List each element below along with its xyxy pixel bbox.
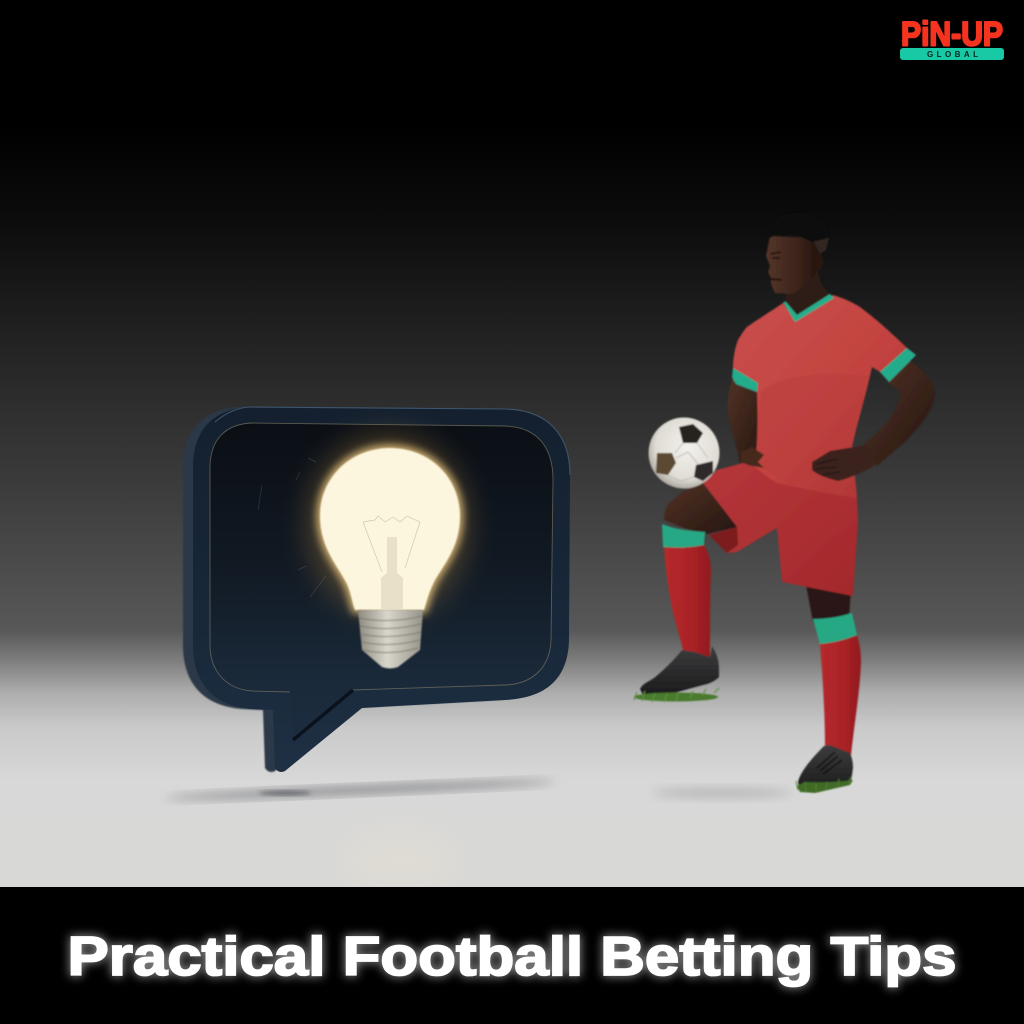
ear bbox=[815, 254, 823, 270]
right arm bbox=[862, 358, 935, 466]
bulb glass bbox=[320, 448, 460, 610]
standing leg sock bbox=[820, 635, 861, 755]
logo tagline: GLOBAL bbox=[927, 50, 978, 59]
boot laces bbox=[817, 752, 842, 774]
tail groove bbox=[293, 690, 353, 740]
eye and brow bbox=[770, 252, 781, 258]
raised leg thigh bbox=[664, 483, 737, 534]
face bbox=[766, 236, 821, 294]
shorts bbox=[703, 463, 858, 596]
bulb screw base bbox=[358, 610, 423, 668]
bubble outer frame bbox=[193, 407, 570, 772]
logo teal bar bbox=[900, 48, 1004, 60]
shirt collar bbox=[783, 294, 834, 322]
raised leg boot bbox=[640, 646, 719, 695]
scratches bbox=[258, 458, 326, 597]
shorts inner shade bbox=[709, 527, 738, 553]
floor shadows bbox=[165, 778, 792, 890]
bottom title bar bbox=[0, 887, 1024, 1024]
bulb filament bbox=[363, 516, 420, 610]
bubble inner panel bbox=[210, 423, 553, 740]
football bbox=[648, 418, 720, 488]
raised leg green band bbox=[662, 524, 705, 548]
title: Practical Football Betting Tips bbox=[68, 925, 956, 987]
standing leg knee bbox=[806, 585, 851, 622]
bulb halo bbox=[320, 448, 460, 610]
right hand bbox=[812, 445, 877, 481]
panel edge highlight bbox=[210, 423, 553, 692]
standing leg grass bbox=[796, 777, 853, 793]
bubble extruded side bbox=[183, 407, 560, 772]
bulb glow bbox=[306, 433, 470, 617]
shirt bbox=[733, 295, 916, 498]
sleeve cuffs bbox=[732, 348, 916, 392]
bubble rim highlight bbox=[215, 407, 570, 475]
lips bbox=[771, 279, 782, 280]
hair bbox=[768, 213, 829, 242]
title glow: Practical Football Betting Tips bbox=[68, 925, 956, 987]
logo wordmark: PiN-UP bbox=[901, 16, 1003, 54]
speech bubble with light bulb bbox=[183, 407, 570, 772]
left hand bbox=[741, 447, 764, 468]
football player bbox=[634, 213, 935, 793]
hair fade bbox=[812, 238, 829, 254]
standing leg boot bbox=[798, 745, 853, 792]
logo bbox=[900, 16, 1004, 60]
head bbox=[766, 213, 829, 294]
raised leg sock bbox=[664, 545, 711, 657]
left arm bbox=[728, 378, 762, 464]
standing leg green band bbox=[813, 613, 857, 644]
neck bbox=[784, 262, 832, 322]
shirt fold shade bbox=[756, 374, 868, 498]
raised leg grass bbox=[634, 688, 719, 702]
